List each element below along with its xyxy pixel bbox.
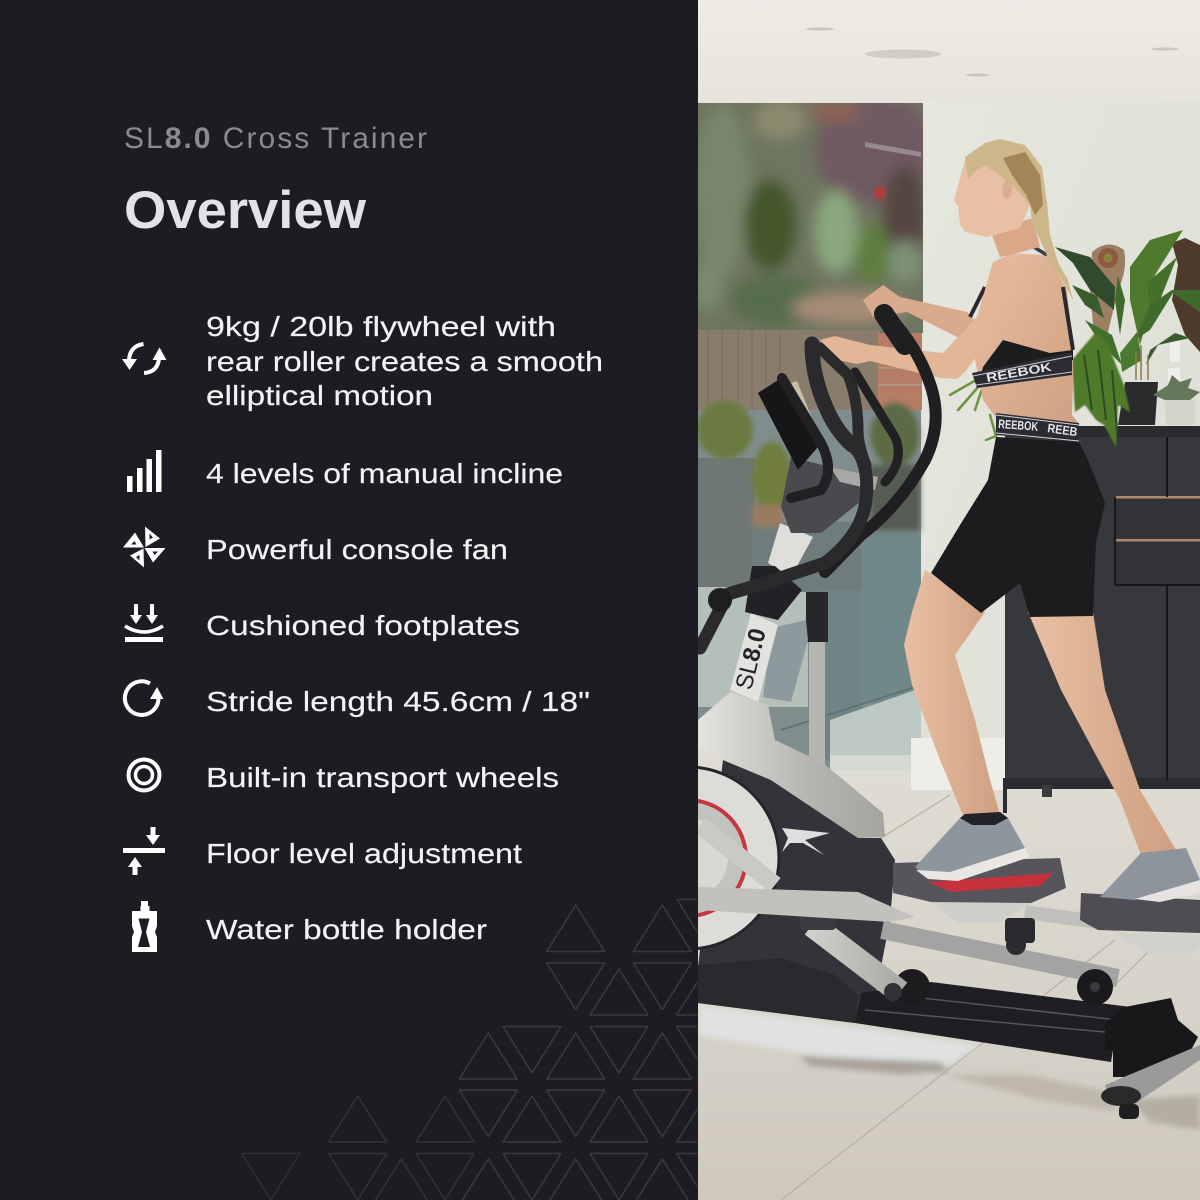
machine: small roller xyxy=(1005,918,1035,955)
machine: rear stabiliser xyxy=(1101,1045,1200,1119)
fence and brick xyxy=(698,330,922,412)
icon: water bottle xyxy=(132,901,157,952)
heading: Overview: Overview xyxy=(124,181,367,240)
feature: water bottle holder xyxy=(132,901,487,952)
machine: front roller xyxy=(894,969,930,1005)
decorative triangle pattern xyxy=(242,900,735,1200)
glass balustrade and planters xyxy=(697,401,921,771)
fern beside woman xyxy=(950,332,1130,447)
photo: woman on cross trainer xyxy=(698,0,1200,1200)
text: incline: 4 levels of manual incline xyxy=(206,458,563,489)
machine: pedal beam xyxy=(698,887,915,922)
woman: bra top: REEBOK xyxy=(985,360,1053,385)
machine: crank arm xyxy=(700,825,775,885)
machine: rails xyxy=(855,982,1131,1062)
text: console fan: Powerful console fan xyxy=(206,534,508,565)
icon: fan blades xyxy=(123,526,166,568)
woman: far leg xyxy=(1028,612,1176,858)
woman: near leg xyxy=(904,570,1001,820)
machine: link clamp xyxy=(800,908,836,930)
woman: front shoe xyxy=(915,812,1030,881)
machine: pedal arm to far footplate xyxy=(1025,912,1120,925)
text: flywheel description: rear roller creates a smooth xyxy=(206,346,603,377)
machine: silver hood xyxy=(698,692,885,838)
woman: head and hair xyxy=(954,139,1073,300)
machine: rail highlight xyxy=(865,995,1118,1032)
Reebok logo on housing xyxy=(782,828,830,855)
subtitle: SL8.0 Cross Trainer: SL8.0 Cross Trainer xyxy=(124,122,427,155)
floor shadows xyxy=(698,1005,1200,1130)
machine: rear footplate xyxy=(1080,893,1200,953)
icon: wheel rings xyxy=(128,760,160,790)
machine: console xyxy=(758,380,878,533)
machine: diagonal link xyxy=(812,925,902,1001)
icon: rotating arrows xyxy=(122,344,166,373)
machine: fixed handlebars xyxy=(782,372,898,498)
ceiling xyxy=(698,0,1200,104)
machine: post with SL8.0 label: SL8.0 xyxy=(731,626,772,692)
text: footplates: Cushioned footplates xyxy=(206,610,520,641)
feature: incline xyxy=(127,450,563,492)
woman: cycling shorts xyxy=(931,437,1105,617)
icon: signal bars xyxy=(127,450,162,492)
machine: rear roller xyxy=(1077,969,1113,1005)
icon: stride arc arrow xyxy=(125,681,164,715)
feature: console fan xyxy=(123,526,508,568)
woman: rear shoe xyxy=(1100,848,1200,902)
machine: post with SL8.0 label xyxy=(730,523,813,702)
skirting xyxy=(911,738,1006,790)
feature: floor level adjustment xyxy=(123,827,522,875)
feature: flywheel xyxy=(122,311,603,411)
text: stride length: Stride length 45.6cm / 18" xyxy=(206,686,590,717)
machine: rear tube xyxy=(882,930,1118,978)
machine: moving arm near xyxy=(700,344,867,648)
text: transport wheels: Built-in transport wheels xyxy=(206,762,559,793)
text: flywheel description: 9kg / 20lb flywheel with xyxy=(206,311,556,342)
wall masks and plants xyxy=(1055,230,1200,425)
feature: transport wheels xyxy=(128,760,559,793)
woman: torso xyxy=(975,253,1080,425)
woman: far arm xyxy=(863,285,985,337)
woman: waistband: REEBOK xyxy=(998,417,1039,434)
machine: front footplate xyxy=(893,858,1066,923)
panel: dark overview background xyxy=(0,0,698,1200)
floor xyxy=(698,745,1200,1200)
cabinet xyxy=(1003,426,1200,813)
icon: cushioned footplate xyxy=(125,604,163,642)
wall xyxy=(921,100,1200,800)
icon: level arrows xyxy=(123,827,165,875)
machine: rear silver post xyxy=(806,592,828,766)
text: flywheel description xyxy=(206,311,603,411)
floor tile joints xyxy=(781,795,1150,1200)
feature: stride length xyxy=(125,681,590,717)
garden view through window xyxy=(698,103,923,333)
ceiling lights xyxy=(806,28,1179,76)
woman: waistband xyxy=(996,413,1079,442)
machine: flywheel housing xyxy=(698,760,895,1024)
text: floor level: Floor level adjustment xyxy=(206,838,522,869)
woman: front strap xyxy=(970,287,985,317)
text: flywheel description: elliptical motion xyxy=(206,380,433,411)
feature: footplates xyxy=(125,604,520,642)
machine: end cap xyxy=(1105,998,1198,1077)
woman: near arm xyxy=(820,255,1015,379)
woman: bra top xyxy=(972,243,1073,388)
machine: arm pivot hub xyxy=(708,588,732,612)
woman: waistband: REEB xyxy=(1047,421,1078,439)
machine: water bottle xyxy=(763,620,808,702)
machine: moving arm far xyxy=(825,314,936,572)
text: bottle holder: Water bottle holder xyxy=(206,914,487,945)
